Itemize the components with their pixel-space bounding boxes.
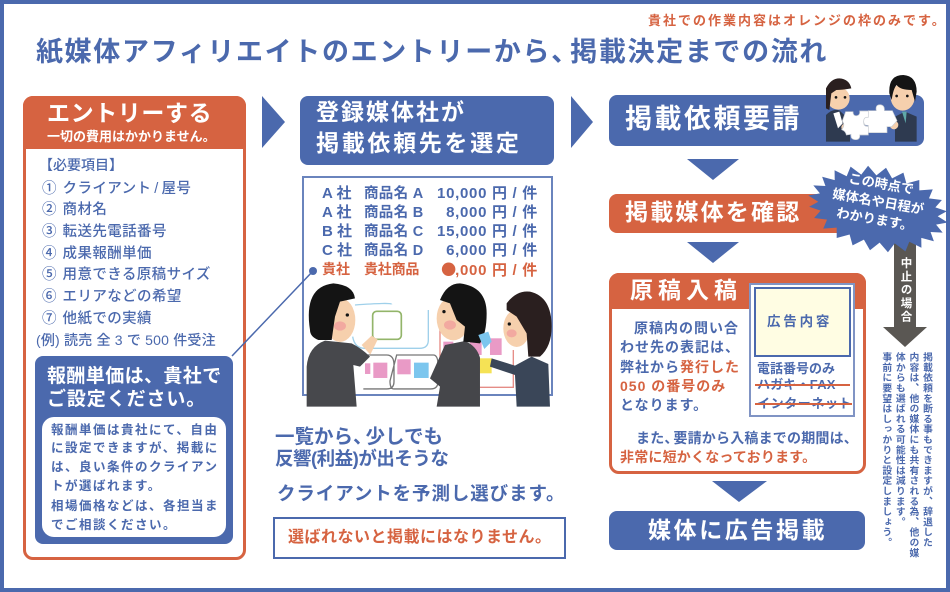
required items list <box>36 157 216 348</box>
callout arrow: cancellation <box>883 242 927 347</box>
required items list: (例) 読売 全 3 で 500 件受注 <box>36 332 216 348</box>
ad content area <box>754 287 851 357</box>
panel: price table: A 社 <box>322 204 351 221</box>
callout arrow: cancellation: 中止の場合 <box>900 257 912 324</box>
panel: price table: 貴社 <box>322 261 350 277</box>
manuscript frame <box>609 273 866 474</box>
ad sample: 電話番号のみ <box>757 361 835 376</box>
step: request heading: 掲載依頼要請 <box>625 104 802 134</box>
panel: price table: ●,000 円 / 件 <box>441 259 538 280</box>
note: orange frame scope: 貴社での作業内容はオレンジの枠のみです。 <box>648 13 947 28</box>
panel: manuscript submission <box>609 273 866 474</box>
panel: price table: B 社 <box>322 223 352 240</box>
cancellation note: 体からも選ばれる可能性は減ります。 <box>894 352 905 527</box>
panel: select media heading: 登録媒体社が <box>316 99 466 125</box>
manuscript body text: 原稿内の問い合 <box>634 320 739 336</box>
required items list: ⑦ 他紙での実績 <box>42 311 152 327</box>
panel: price table <box>302 176 553 396</box>
cancellation note <box>880 352 933 558</box>
callout: set your own price: 報酬単価は、貴社で <box>47 366 222 387</box>
man 2 <box>430 341 480 407</box>
panel: price table: 15,000 円 / 件 <box>437 223 538 240</box>
ad content area: 広告内容 <box>767 314 832 329</box>
entry heading: エントリーする <box>47 100 212 126</box>
ad sample: インターネット <box>757 396 852 411</box>
panel: price table: 6,000 円 / 件 <box>446 242 538 259</box>
manuscript header: 原稿入稿 <box>630 277 742 303</box>
starburst callout <box>808 166 946 252</box>
ad sample <box>749 283 855 417</box>
required items list: ⑤ 用意できる原稿サイズ <box>42 267 211 283</box>
manuscript body text: わせ先の表記は、 <box>620 339 740 355</box>
panel frame <box>23 96 246 560</box>
panel: price table: 8,000 円 / 件 <box>446 204 538 221</box>
man 1 <box>307 341 370 407</box>
step: publication <box>609 511 865 550</box>
entry subheading: 一切の費用はかかりません。 <box>47 129 216 144</box>
callout: set your own price: ご設定ください。 <box>47 389 206 410</box>
warning box: 選ばれないと掲載にはなりません。 <box>288 529 552 546</box>
text: select clients: 反響(利益)が出そうな <box>275 448 448 469</box>
schedule note <box>620 430 858 465</box>
schedule note: 非常に短かくなっております。 <box>620 449 816 465</box>
panel: price table: C 社 <box>322 242 352 259</box>
ad sample: ハガキ・FAX <box>757 377 836 392</box>
callout detail text: 報酬単価は貴社にて、自由 <box>51 423 218 437</box>
panel: price table: A 社 <box>322 185 351 202</box>
starburst callout: 媒体名や日程が <box>831 186 925 217</box>
callout detail text <box>42 417 226 537</box>
required items list: ④ 成果報酬単価 <box>42 246 152 262</box>
manuscript body text: となります。 <box>620 397 708 413</box>
panel: select media heading <box>300 96 554 165</box>
cancellation note: 掲載依頼を断る事もできますが、辞退した <box>921 352 932 548</box>
callout: set your own price <box>35 356 233 544</box>
callout detail text: は、良い条件のクライアン <box>51 460 219 474</box>
callout detail text: に設定できますが、掲載に <box>51 441 219 455</box>
manuscript body text: 弊社から発行した <box>620 359 740 375</box>
title: 紙媒体アフィリエイトのエントリーから、掲載決定までの流れ <box>36 37 828 67</box>
panel: entry <box>23 96 246 560</box>
woman <box>490 357 550 407</box>
panel: select media heading: 掲載依頼先を選定 <box>316 130 522 156</box>
required items list: ① クライアント / 屋号 <box>42 181 191 197</box>
text: select clients <box>275 426 565 504</box>
cancellation note: 事前に要望はしっかりと設定しましょう。 <box>880 352 891 548</box>
panel: price table: 商品名 C <box>364 224 424 240</box>
callout detail text: 相場価格などは、各担当ま <box>51 499 219 513</box>
panel: price table: 商品名 D <box>364 243 424 259</box>
text: select clients: 一覧から、少しでも <box>275 426 443 448</box>
cancellation note: 内容は、他の媒体にも共有される為、他の媒 <box>907 352 918 558</box>
step: confirm media heading: 掲載媒体を確認 <box>625 199 801 225</box>
text: select clients: クライアントを予測し選びます。 <box>277 483 565 504</box>
required items list: 【必要項目】 <box>39 157 123 173</box>
step: publication: 媒体に広告掲載 <box>648 517 827 543</box>
starburst callout: わかります。 <box>835 205 915 233</box>
manuscript body text: 050 の番号のみ <box>620 378 726 394</box>
manuscript body text <box>620 320 740 413</box>
required items list: ③ 転送先電話番号 <box>42 224 167 240</box>
schedule note: また、要請から入稿までの期間は、 <box>636 430 858 446</box>
panel: price table: 10,000 円 / 件 <box>437 185 538 202</box>
callout detail text: トが選ばれます。 <box>51 479 162 493</box>
panel: price table: 商品名 B <box>364 205 424 221</box>
step: confirm media heading <box>609 194 849 233</box>
warning box <box>273 517 566 559</box>
callout detail text: でご相談ください。 <box>51 518 177 532</box>
panel: price table: 商品名 A <box>364 186 424 202</box>
entry header <box>23 96 246 149</box>
manuscript header <box>609 273 866 309</box>
required items list: ⑥ エリアなどの希望 <box>42 289 182 305</box>
starburst callout: この時点で <box>847 171 915 197</box>
step: request heading <box>609 95 924 146</box>
required items list: ② 商材名 <box>42 202 107 218</box>
panel: price table: 貴社商品 <box>364 261 419 277</box>
